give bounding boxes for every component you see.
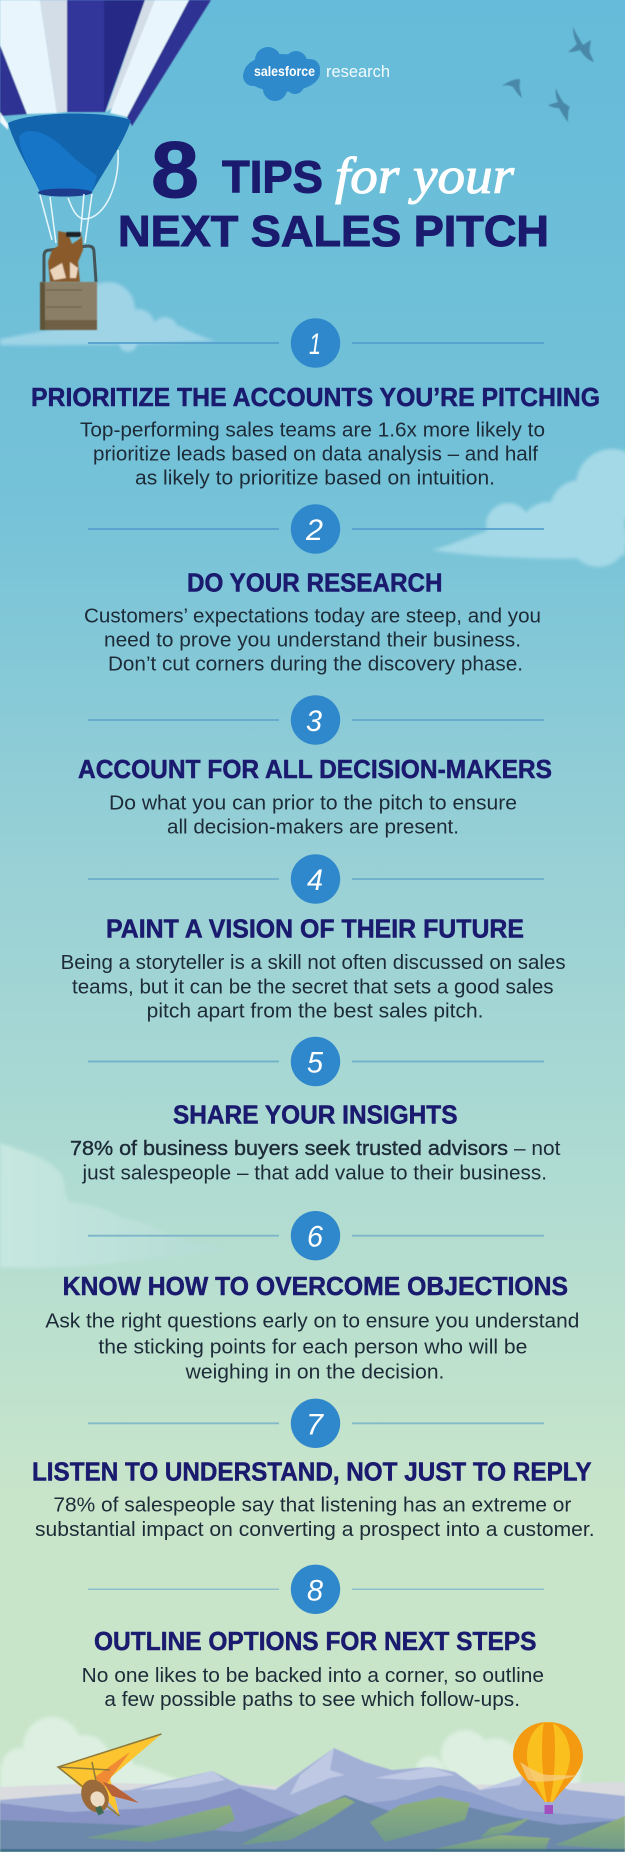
body 6: weighing in on the decision. <box>185 1361 444 1384</box>
body 3: Do what you can prior to the pitch to ensure <box>109 791 517 814</box>
heading 6: KNOW HOW TO OVERCOME OBJECTIONS <box>63 1271 568 1301</box>
divider with number 4: 4 <box>307 864 323 897</box>
body 7 <box>35 1493 595 1541</box>
divider with number 7: 7 <box>306 1408 324 1441</box>
basket <box>40 282 97 330</box>
balloon basket <box>544 1805 553 1814</box>
balloon envelope <box>513 1722 583 1802</box>
heading 4: PAINT A VISION OF THEIR FUTURE <box>106 914 524 944</box>
logo cloud <box>243 47 320 101</box>
divider with number 2: 2 <box>305 514 323 547</box>
body 7: substantial impact on converting a prospect into a customer. <box>35 1518 595 1541</box>
bear with binoculars <box>48 231 83 282</box>
ropes <box>40 150 118 250</box>
tip 8 <box>82 1565 544 1711</box>
wing orange panel <box>95 1752 130 1790</box>
basket frame <box>44 246 96 282</box>
body 4 <box>61 951 566 1022</box>
foreground strip <box>0 1849 625 1852</box>
mountain landscape <box>0 1748 625 1852</box>
tip 2 <box>84 504 544 676</box>
body 6 <box>45 1309 579 1384</box>
body 8: a few possible paths to see which follow-ups. <box>104 1688 520 1711</box>
body 8: No one likes to be backed into a corner, so outline <box>82 1664 544 1687</box>
bird 3 <box>548 88 570 122</box>
body 2 <box>84 604 541 676</box>
body 1: as likely to prioritize based on intuition. <box>135 466 495 490</box>
divider with number 3 <box>88 695 544 745</box>
hang glider with bear <box>58 1734 162 1819</box>
tip 4 <box>61 854 566 1022</box>
skirt <box>8 114 131 192</box>
green hills <box>85 1797 625 1850</box>
body 8 <box>82 1664 544 1711</box>
divider with number 6: 6 <box>307 1221 323 1254</box>
logo wordmark: salesforce <box>254 63 315 79</box>
far mountains <box>0 1748 625 1852</box>
heading 7: LISTEN TO UNDERSTAND, NOT JUST TO REPLY <box>32 1457 592 1487</box>
body 2: need to prove you understand their business. <box>104 629 521 652</box>
bird 2 <box>502 79 522 98</box>
small hot air balloon <box>513 1722 583 1814</box>
glider wing <box>58 1734 162 1816</box>
body 4: teams, but it can be the secret that sets a good sales <box>72 975 554 998</box>
body 1 <box>80 419 545 490</box>
title: NEXT SALES PITCH: NEXT SALES PITCH <box>118 207 549 256</box>
bear pilot <box>76 1775 115 1819</box>
divider with number 8 <box>88 1565 544 1614</box>
snow highlights <box>140 1748 525 1795</box>
heading 2: DO YOUR RESEARCH <box>187 567 442 597</box>
balloon centre stripe <box>542 1723 555 1802</box>
divider with number 1: 1 <box>309 328 321 361</box>
divider with number 5: 5 <box>307 1046 323 1080</box>
tip 5 <box>70 1037 561 1184</box>
tip 1 <box>31 318 600 490</box>
bird 1 <box>568 27 594 62</box>
slate foothills <box>0 1795 625 1852</box>
title: for your: for your <box>335 148 515 205</box>
body 6: Ask the right questions early on to ensure you understand <box>45 1309 579 1332</box>
body 5 <box>70 1137 561 1184</box>
divider with number 2 <box>88 504 544 554</box>
envelope stripes <box>0 0 211 130</box>
wing frame <box>58 1734 162 1816</box>
body 4: Being a storyteller is a skill not often discussed on sales <box>61 951 566 974</box>
title: 8: 8 <box>151 125 199 214</box>
logo word: research: research <box>326 62 390 81</box>
body 4: pitch apart from the best sales pitch. <box>147 999 483 1022</box>
balloon stripes <box>527 1722 570 1802</box>
wing tail <box>103 1782 139 1803</box>
divider with number 7 <box>88 1399 544 1448</box>
birds <box>502 27 594 122</box>
hot air balloon: blue and white <box>0 0 211 330</box>
body 6: the sticking points for each person who will be <box>98 1335 527 1358</box>
cloud: top left under basket <box>0 282 216 352</box>
clouds behind mountains <box>0 1717 581 1795</box>
divider with number 3: 3 <box>306 705 322 738</box>
body 1: Top-performing sales teams are 1.6x more likely to <box>80 419 545 442</box>
cloud: left lower <box>0 1143 228 1267</box>
cloud: right middle <box>432 449 625 567</box>
body 3: all decision-makers are present. <box>167 815 459 838</box>
mid mountains right <box>300 1785 625 1852</box>
heading 8: OUTLINE OPTIONS FOR NEXT STEPS <box>94 1626 536 1656</box>
body 3 <box>109 791 517 838</box>
skirt highlight <box>19 131 97 192</box>
tip 7 <box>32 1399 595 1541</box>
burner opening <box>38 188 92 196</box>
divider with number 8: 8 <box>307 1574 323 1607</box>
body 1: prioritize leads based on data analysis – and half <box>93 443 538 466</box>
divider with number 4 <box>88 854 544 904</box>
title: TIPS: TIPS <box>222 152 323 202</box>
tip 3 <box>78 695 552 838</box>
heading 1: PRIORITIZE THE ACCOUNTS YOU’RE PITCHING <box>31 382 600 412</box>
heading 5: SHARE YOUR INSIGHTS <box>173 1100 458 1130</box>
body 5: just salespeople – that add value to their business. <box>81 1161 547 1184</box>
heading 3: ACCOUNT FOR ALL DECISION-MAKERS <box>78 754 552 784</box>
body 5: – not <box>514 1137 561 1160</box>
divider with number 1 <box>88 318 544 368</box>
divider with number 6 <box>88 1211 544 1260</box>
tip 6 <box>45 1211 579 1384</box>
horizon haze <box>0 1782 625 1815</box>
body 7: 78% of salespeople say that listening has an extreme or <box>53 1493 572 1516</box>
body 2: Don’t cut corners during the discovery phase. <box>108 653 523 676</box>
mid mountains left <box>0 1788 300 1852</box>
title <box>118 125 549 256</box>
logo: salesforce research <box>243 47 390 101</box>
body 2: Customers’ expectations today are steep, and you <box>84 604 541 627</box>
divider with number 5 <box>88 1037 544 1086</box>
body 5: 78% of business buyers seek trusted advisors <box>70 1137 508 1160</box>
cloud wisp across balloon <box>520 1762 578 1782</box>
